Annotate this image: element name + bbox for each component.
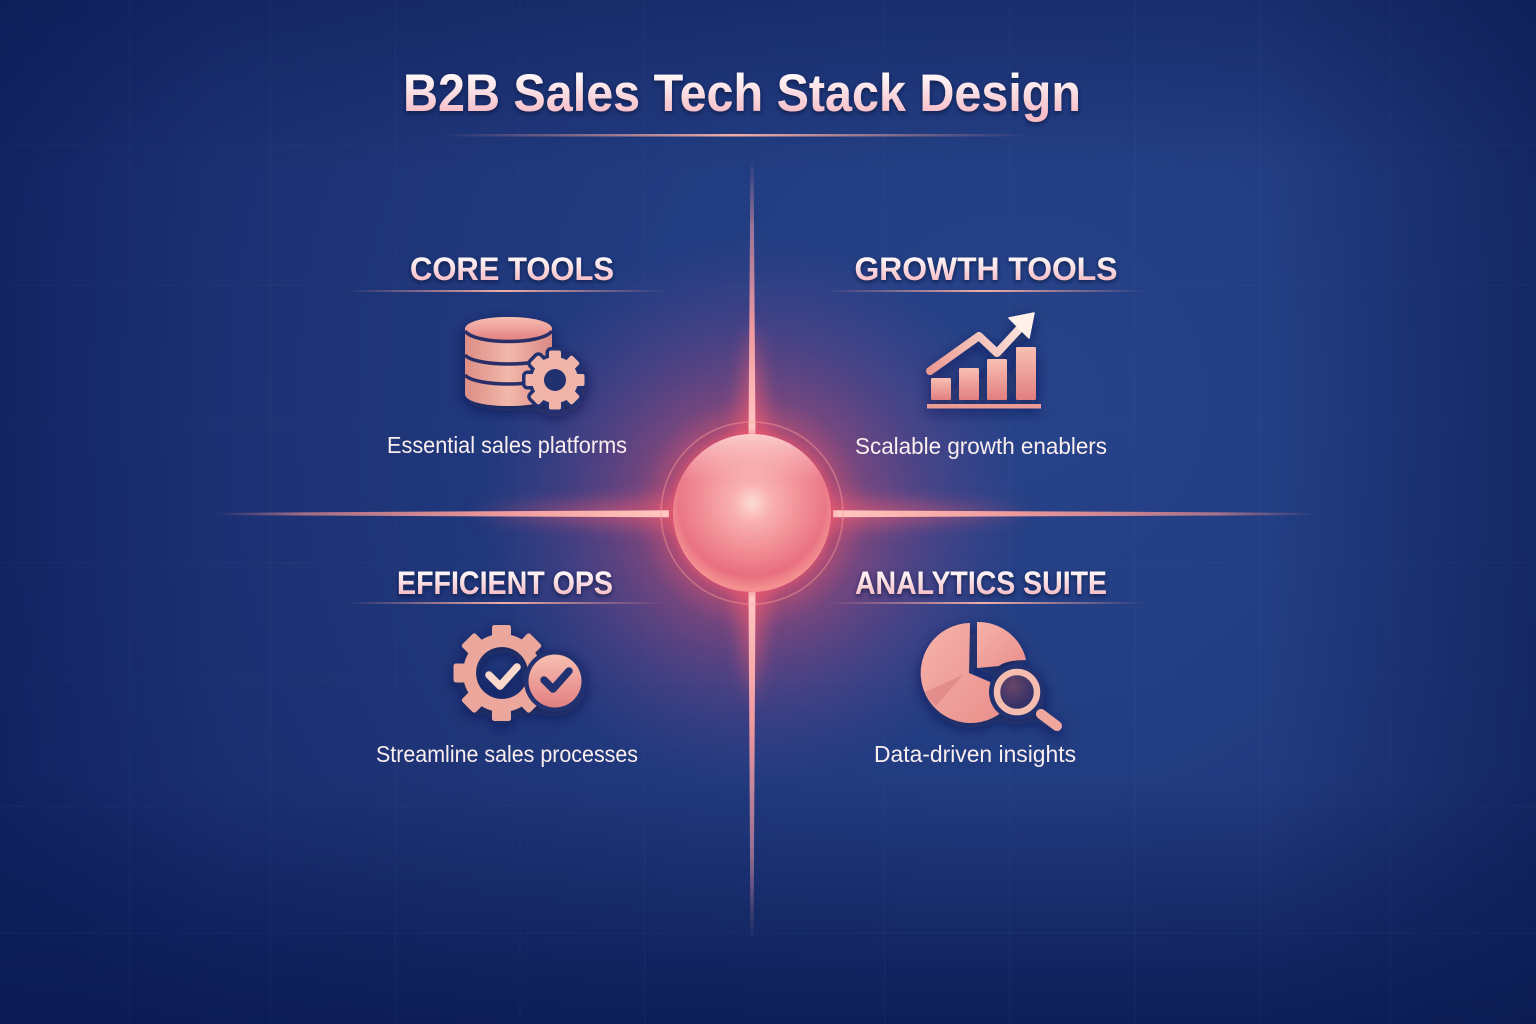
heading: efficient ops: EFFICIENT OPS (397, 565, 613, 601)
description: efficient ops: Streamline sales processes (376, 741, 638, 767)
divider: growth tools (825, 290, 1145, 292)
title: B2B Sales Tech Stack Design (403, 64, 1081, 123)
heading: growth tools: GROWTH TOOLS (854, 251, 1118, 287)
divider: analytics suite (825, 602, 1145, 604)
panel: growth tools (825, 251, 1145, 459)
central hub with light beams (215, 158, 1315, 940)
icon: database with gear (465, 317, 584, 410)
heading: analytics suite: ANALYTICS SUITE (855, 565, 1107, 601)
panel: analytics suite (825, 565, 1145, 767)
description: core tools: Essential sales platforms (387, 432, 627, 458)
icon: pie chart with magnifier (921, 622, 1057, 726)
title underline (440, 134, 1030, 136)
divider: efficient ops (345, 602, 665, 604)
panel: core tools (345, 251, 665, 458)
icon: gear with check marks (454, 625, 586, 721)
description: analytics suite: Data-driven insights (874, 741, 1076, 767)
divider: core tools (345, 290, 665, 292)
icon: growth bar chart (927, 313, 1041, 408)
description: growth tools: Scalable growth enablers (855, 433, 1107, 459)
heading: core tools: CORE TOOLS (410, 251, 614, 287)
panel: efficient ops (345, 565, 665, 767)
